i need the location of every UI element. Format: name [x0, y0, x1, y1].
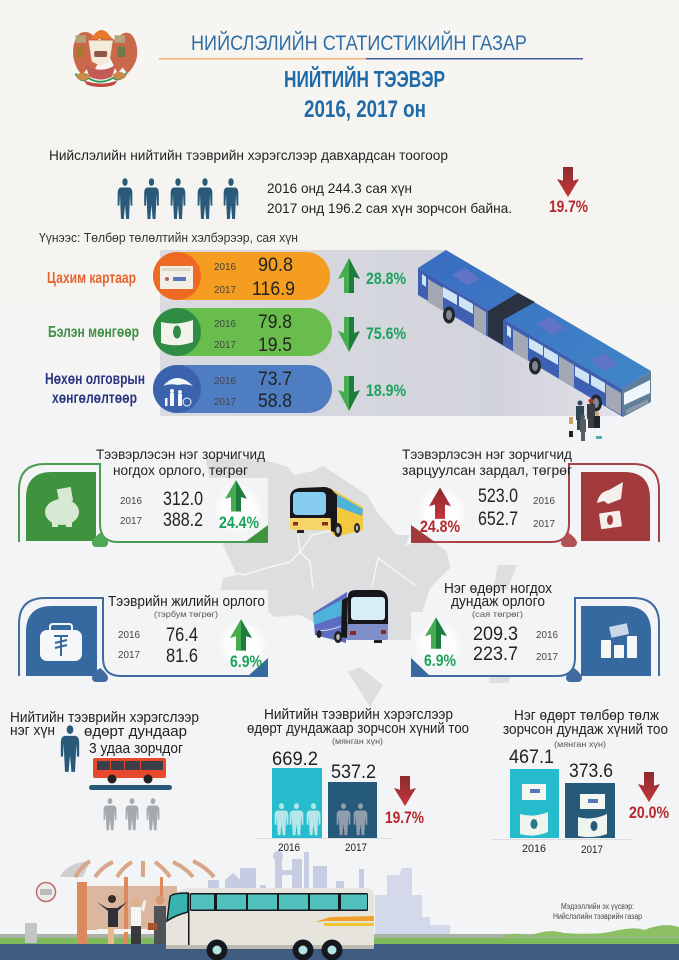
panel: electronic card row: 116.9 [252, 278, 295, 300]
illustration: blue bus [313, 590, 388, 643]
bar: 2016 [272, 748, 322, 854]
panel: electronic card row: Цахим картаар [47, 270, 136, 287]
text: passenger totals: 2017 онд 196.2 сая хүн зорчсон байна. [267, 200, 512, 216]
illustration: articulated blue bus [418, 250, 651, 417]
text: chart heading: Нэг өдөрт төлбөр төлж [514, 708, 659, 724]
icon: banknote [161, 320, 193, 345]
panel: cash row: 2017 [214, 339, 236, 351]
bar: 2016: 2016 [522, 843, 546, 855]
bar: 2017: 2017 [345, 842, 367, 854]
percent: total decline: 19.7% [549, 197, 588, 216]
icon: three gray people [104, 798, 159, 830]
panel: annual revenue: 2016 [118, 629, 140, 641]
panel: cash row: Бэлэн мөнгөөр [48, 324, 139, 341]
panel: electronic card row: 2017 [214, 284, 236, 296]
icon: card [160, 266, 193, 289]
text: panel heading: (сая төгрөг) [472, 609, 523, 619]
title [284, 65, 445, 123]
icon: umbrella with family [163, 378, 193, 406]
panel: discount row: 2017 [214, 396, 236, 408]
text: passenger totals [267, 180, 512, 216]
scene: city skyline [208, 851, 450, 937]
map district borders [237, 530, 415, 588]
bar: 2016: 669.2 [272, 748, 318, 770]
panel: electronic card row: 90.8 [258, 254, 293, 276]
panel: cost per passenger: 523.0 [478, 485, 518, 507]
title: НИЙТИЙН ТЭЭВЭР [284, 65, 445, 92]
panel: cash row: 2016 [214, 318, 236, 330]
panel: revenue per passenger: 388.2 [163, 509, 203, 531]
panel: cost per passenger: 2017 [533, 518, 555, 530]
text: chart heading: Нийтийн тээврийн хэрэгслээр [264, 707, 453, 723]
panel: cost per passenger: 24.8% [420, 517, 460, 536]
icon: red bus [89, 758, 172, 790]
panel: cash row: 19.5 [258, 334, 292, 356]
text: panel heading [108, 594, 265, 619]
text: trips per person: нэг хүн [10, 723, 55, 739]
panel: cost per passenger: 2016 [533, 495, 555, 507]
percent: decline: 19.7% [385, 808, 424, 827]
panel: cash row: 79.8 [258, 311, 292, 333]
icon: person [61, 725, 79, 772]
bar: 2016: 2016 [278, 842, 300, 854]
panel: revenue per passenger: 2017 [120, 515, 142, 527]
icon: hand dropping money [597, 482, 623, 529]
percent: decline: 20.0% [629, 803, 669, 822]
panel: cost per passenger: 652.7 [478, 508, 518, 530]
text: panel heading [96, 446, 265, 478]
panel: electronic card row: 2016 [214, 261, 236, 273]
subheading: payment type: Үүнээс: Төлбөр төлөлтийн хэлбэрээр, сая хүн [39, 230, 298, 245]
panel: discount row [45, 365, 406, 413]
panel: discount row: 58.8 [258, 390, 292, 412]
section: total passengers [49, 147, 588, 219]
panel: cost per passenger [402, 446, 659, 547]
icon: bus stop sign [36, 882, 56, 902]
illustration: yellow bus [290, 487, 363, 537]
panel: discount row: Нөхөн олговрын [45, 371, 145, 388]
panel: daily average revenue: 2017 [536, 651, 558, 663]
panel: daily average revenue: 209.3 [473, 623, 518, 645]
arrow: total decline [557, 167, 579, 197]
icon: trash bin [25, 923, 37, 943]
emblem logo [73, 30, 137, 87]
text: panel heading: зарцуулсан зардал, төгрөг [402, 462, 572, 478]
panel: revenue per passenger [19, 446, 269, 547]
text: source note: Нийслэлийн тээврийн газар [553, 912, 642, 921]
section: trips per person [10, 710, 199, 830]
text: panel heading: Нэг өдөрт ногдох [444, 581, 553, 597]
panel: electronic card row [47, 252, 406, 300]
text: panel heading: ногдох орлого, төгрөг [113, 462, 248, 478]
panel: annual revenue: 81.6 [166, 645, 198, 667]
scene: bus stop shelter [60, 861, 214, 944]
panel: revenue per passenger: 312.0 [163, 488, 203, 510]
text: chart heading: (мянган хүн) [554, 739, 606, 749]
panel: cash row [48, 308, 406, 356]
icon: piggy bank [45, 487, 79, 527]
scene: ground and road [0, 925, 679, 960]
text: chart heading: зорчсон дундаж хүний тоо [503, 722, 668, 738]
roof hatches [452, 268, 618, 371]
panel: discount row: 18.9% [366, 381, 406, 400]
chart: average daily paying passengers [492, 708, 669, 856]
text: panel heading: Тээвэрлэсэн нэг зорчигчид [96, 446, 265, 462]
text: chart heading: (мянган хүн) [332, 736, 383, 746]
panel: discount row: 2016 [214, 375, 236, 387]
chart: average daily passengers [247, 707, 469, 854]
arrow: decline [394, 776, 416, 806]
text: panel heading: Тээврийн жилийн орлого [108, 594, 265, 610]
text: panel heading: Тээвэрлэсэн нэг зорчигчид [402, 446, 572, 462]
text: panel heading [402, 446, 572, 478]
bar: 2016 [509, 746, 559, 855]
panel: payment types background band [160, 250, 650, 416]
text: panel heading: дундаж орлого [451, 594, 545, 610]
panel: electronic card row: 28.8% [366, 269, 406, 288]
bar: 2017: 537.2 [331, 761, 376, 783]
panel: revenue per passenger: 24.4% [219, 513, 259, 532]
illustration: waiting passengers [97, 895, 166, 944]
map of Ulaanbaatar districts [205, 456, 517, 707]
icon: bag with tugrik sign [40, 624, 82, 661]
bus windows [422, 274, 605, 393]
panel: annual revenue: 76.4 [166, 624, 198, 646]
illustration: people at bus [569, 398, 602, 441]
text: panel heading [444, 581, 553, 619]
title: 2016, 2017 он [304, 96, 426, 123]
panel: daily average revenue: 223.7 [473, 643, 518, 665]
panel: discount row: 73.7 [258, 368, 292, 390]
icon: five people [118, 178, 238, 219]
panel: annual revenue [19, 590, 273, 682]
panel: discount row: хөнгөлөлтөөр [52, 390, 137, 407]
bus wheels [443, 306, 602, 412]
panel: daily average revenue: 2016 [536, 629, 558, 641]
panel: annual revenue: 2017 [118, 649, 140, 661]
text: trips per person: Нийтийн тээврийн хэрэгслээр [10, 710, 199, 726]
bus joint [488, 293, 535, 345]
panel: revenue per passenger: 2016 [120, 495, 142, 507]
text: trips per person [10, 710, 199, 757]
text: passenger totals: 2016 онд 244.3 сая хүн [267, 180, 412, 196]
arrow: decline [638, 772, 660, 802]
bar: 2017: 2017 [581, 844, 603, 856]
text: panel heading: (тэрбум төгрөг) [154, 609, 218, 619]
panel: annual revenue: 6.9% [230, 652, 262, 671]
panel: cash row: 75.6% [366, 324, 406, 343]
text: source note [553, 902, 642, 921]
icon: bar chart with banknote [601, 623, 637, 658]
header: organisation name: НИЙСЛЭЛИЙН СТАТИСТИКИЙН ГАЗАР [191, 30, 527, 55]
text: chart heading [503, 708, 668, 749]
header divider [159, 58, 583, 60]
bar: 2017: 373.6 [569, 760, 613, 782]
text: passengers heading: Нийслэлийн нийтийн тээврийн хэрэгслээр давхардсан тоогоор [49, 147, 448, 163]
illustration: coach bus [166, 888, 374, 960]
bar: 2016: 467.1 [509, 746, 554, 768]
bar: 2017 [328, 761, 377, 854]
panel: daily average revenue: 6.9% [424, 651, 456, 670]
panel: daily average revenue [408, 581, 659, 682]
text: chart heading [247, 707, 469, 746]
bar: 2017 [565, 760, 615, 856]
text: source note: Мэдээллийн эх үүсвэр: [561, 902, 634, 911]
text: trips per person: өдөрт дундаар [84, 724, 187, 740]
bus doors [428, 279, 621, 415]
text: trips per person: 3 удаа зорчдог [89, 741, 183, 757]
text: chart heading: өдөрт дундажаар зорчсон хүний тоо [247, 721, 469, 737]
